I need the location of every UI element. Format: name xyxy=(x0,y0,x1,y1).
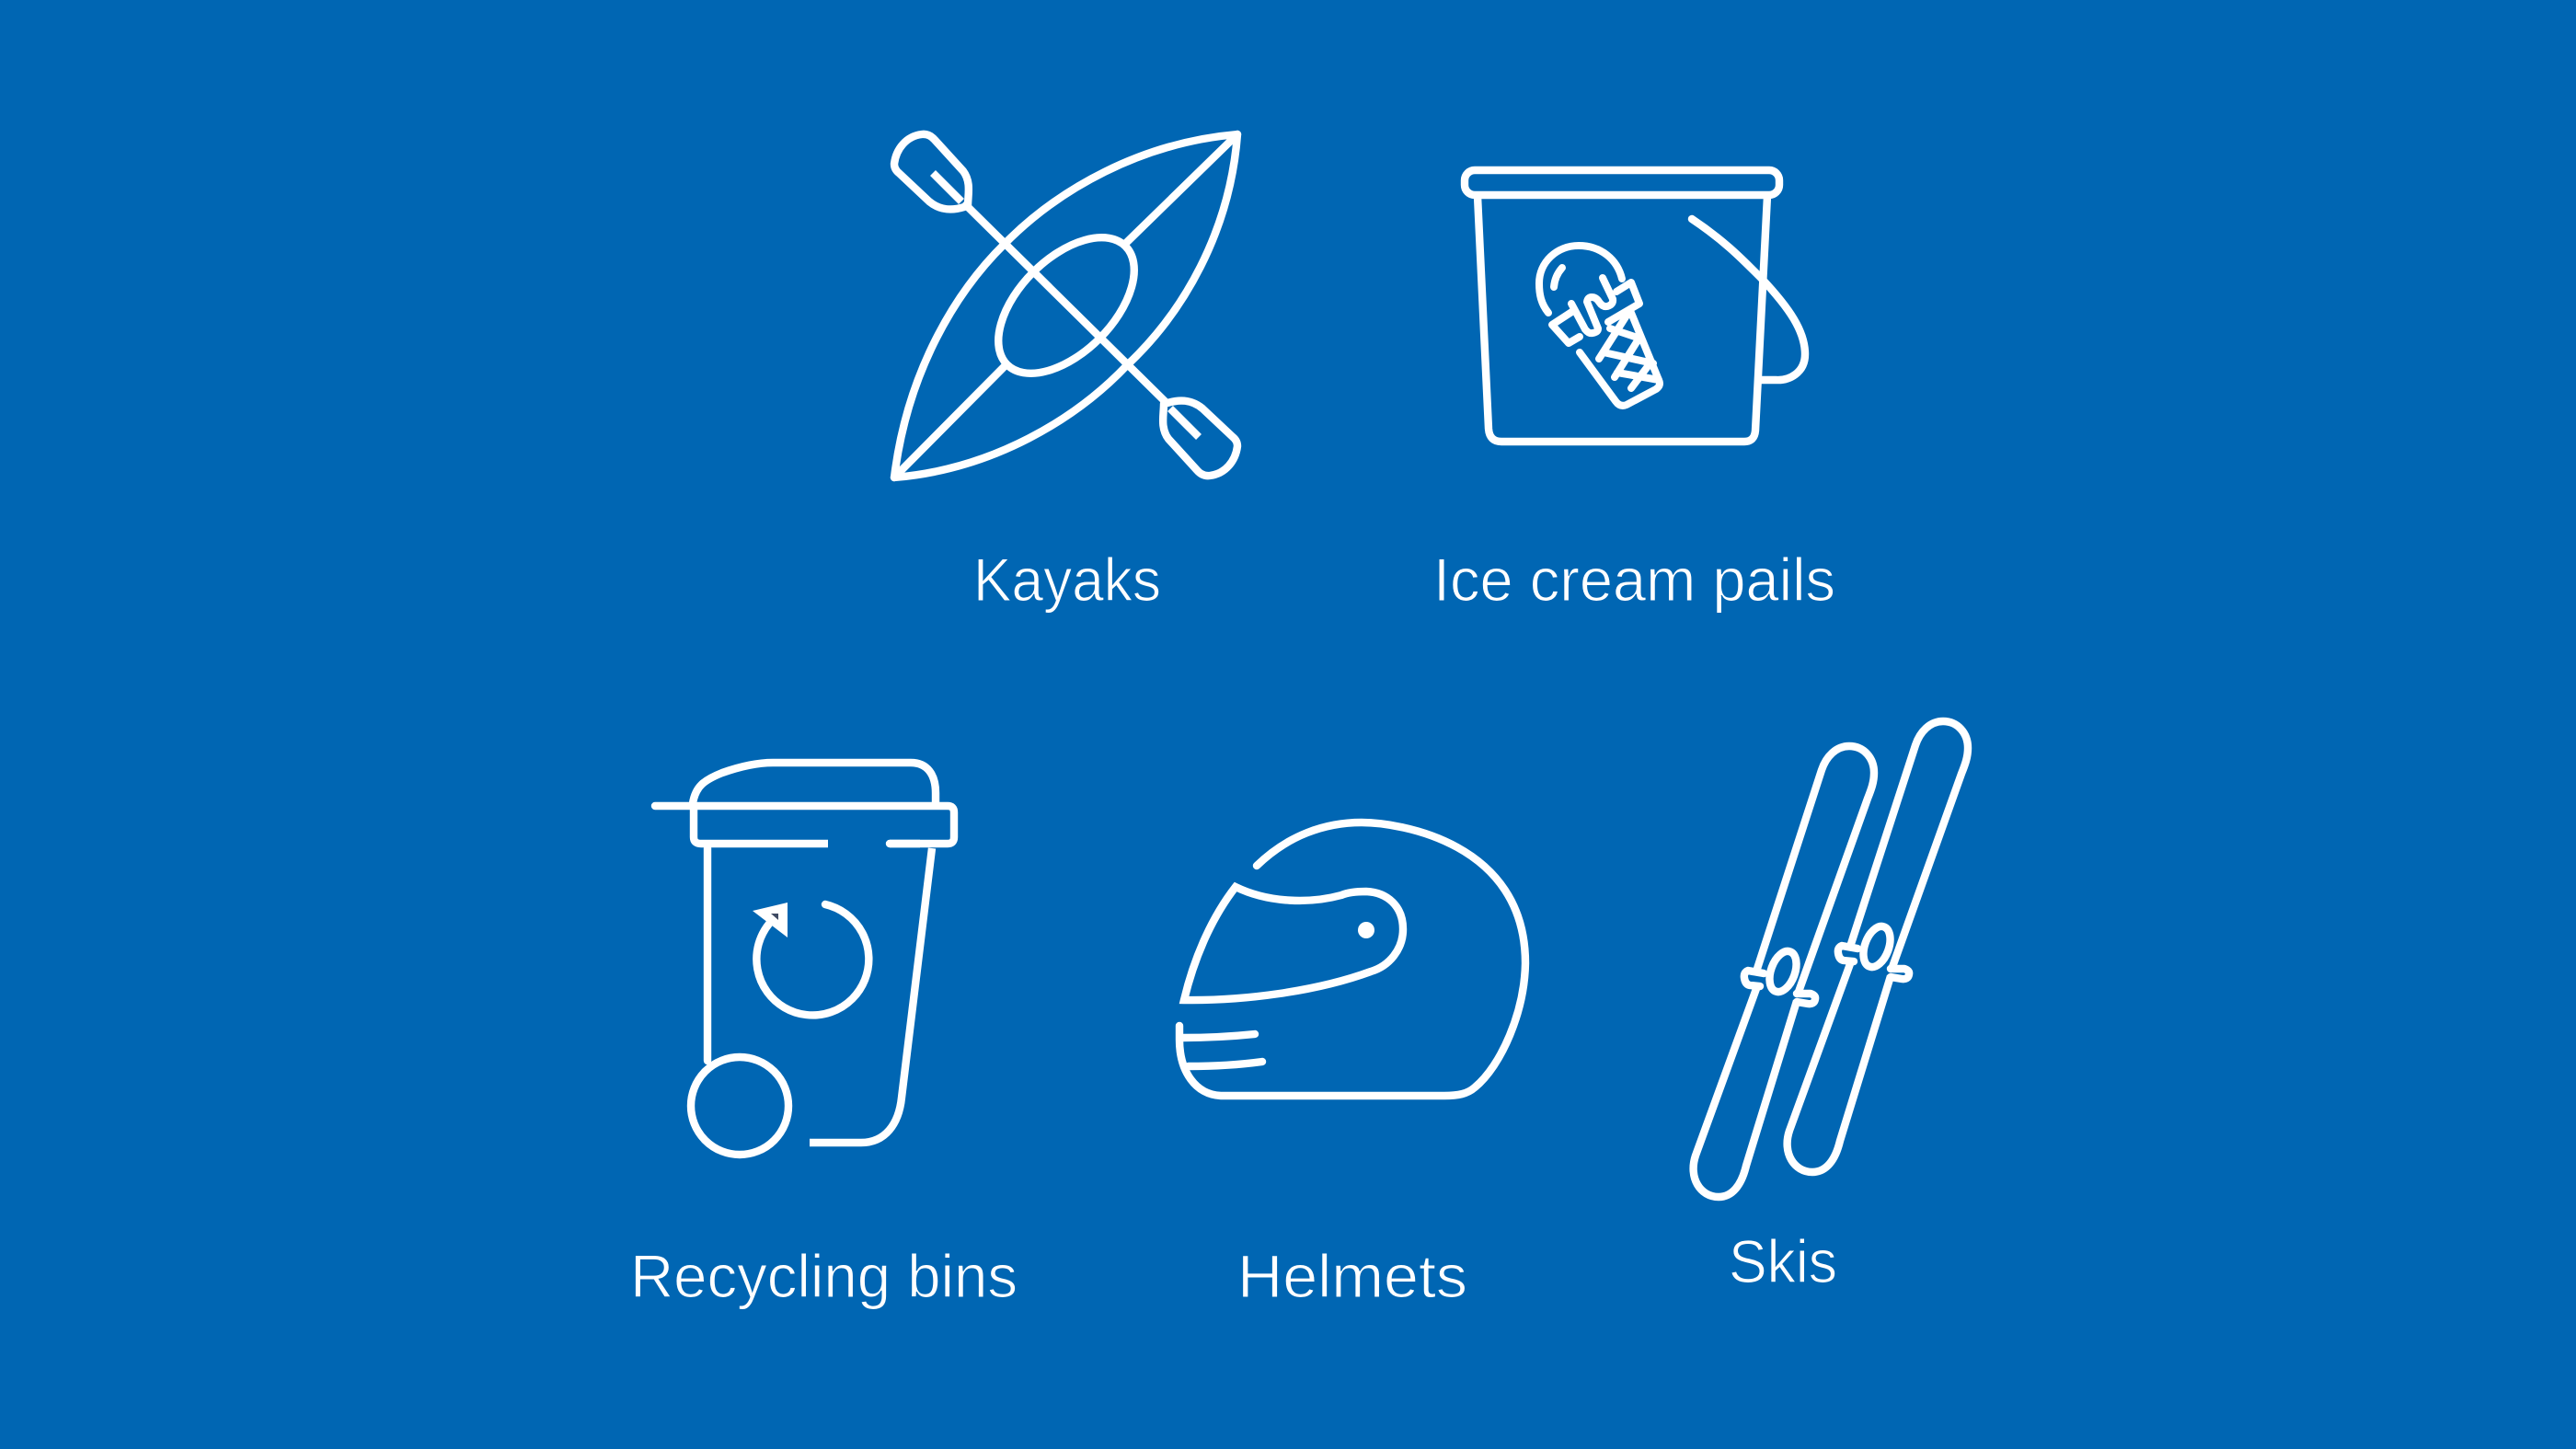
icon: ice cream cone xyxy=(1539,246,1660,406)
icon: wheeled recycling bin xyxy=(655,763,954,1155)
icon: motorcycle helmet xyxy=(1179,822,1525,1096)
label: Helmets: Helmets xyxy=(1237,1242,1467,1310)
label: Kayaks: Kayaks xyxy=(973,546,1161,614)
panel: recycling bins xyxy=(630,763,1018,1310)
icon: kayak with paddle xyxy=(894,134,1237,477)
icon: ice cream pail xyxy=(1465,170,1805,442)
panel: ice cream pails xyxy=(1433,170,1835,614)
icon: pair of skis xyxy=(1694,721,1968,1197)
panel: kayaks xyxy=(894,134,1237,614)
panel: helmets xyxy=(1179,822,1525,1310)
panel: skis xyxy=(1694,721,1968,1295)
icon: circular recycle arrow xyxy=(753,903,868,1015)
label: Recycling bins: Recycling bins xyxy=(630,1242,1018,1310)
label: Skis: Skis xyxy=(1729,1227,1837,1295)
label: Ice cream pails: Ice cream pails xyxy=(1433,546,1835,614)
